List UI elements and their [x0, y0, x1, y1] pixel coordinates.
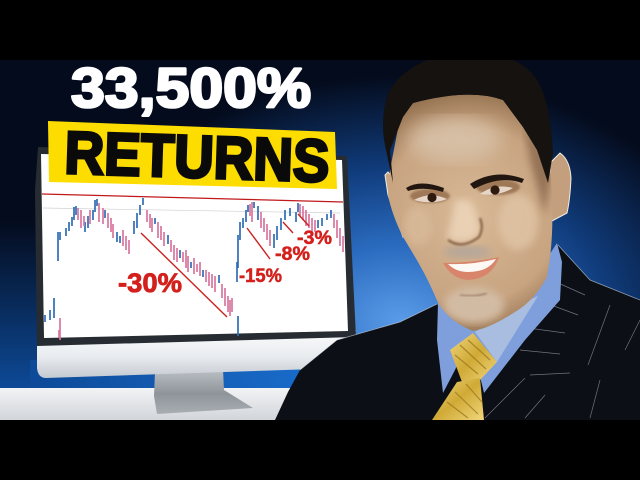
white of left eye	[414, 195, 447, 202]
headline: 33,500%: 33,500%	[71, 56, 311, 119]
label -30%: -30%	[118, 268, 182, 298]
lips	[443, 257, 499, 280]
right iris	[490, 185, 500, 195]
background: blue spotlight	[0, 60, 640, 420]
computer monitor	[35, 147, 356, 414]
lower left glow	[0, 220, 60, 390]
yellow banner	[48, 121, 337, 189]
suit jacket	[275, 245, 640, 420]
face	[388, 95, 552, 331]
tie knot	[450, 333, 497, 382]
chin crease	[460, 293, 487, 296]
teeth	[448, 259, 496, 272]
man in suit	[275, 60, 640, 420]
banner text: RETURNS	[64, 119, 331, 195]
collar shading	[475, 296, 538, 362]
nose highlight	[447, 200, 480, 242]
left ear	[385, 172, 407, 237]
right eye	[480, 185, 513, 195]
blue band behind monitor	[30, 360, 340, 388]
tie stripes	[447, 340, 490, 418]
pink candles	[59, 202, 343, 340]
headline banner: RETURNS	[48, 119, 337, 195]
trend line -3%	[298, 214, 309, 226]
forehead highlight	[409, 118, 501, 162]
left eyebrow	[406, 184, 444, 192]
horizontal grid line	[43, 208, 340, 213]
pinstripes	[485, 282, 640, 418]
left iris	[427, 193, 437, 202]
left eye socket shadow	[410, 189, 450, 203]
trend line -15%	[247, 228, 270, 259]
mouth	[443, 257, 499, 280]
label -8%: -8%	[275, 244, 310, 265]
top letterbox bar	[0, 0, 640, 60]
face shading, clipped to the face	[404, 118, 552, 323]
left eye	[414, 193, 447, 202]
right eye socket shadow	[476, 179, 520, 195]
nose shadow	[448, 218, 482, 244]
hair	[383, 60, 553, 183]
gold tie	[432, 333, 497, 420]
blue candles	[45, 198, 331, 336]
monitor bezel	[35, 147, 356, 346]
shirt collar	[437, 243, 562, 393]
temple shadow	[525, 125, 552, 215]
right cheek highlight	[498, 194, 538, 250]
trend line -30%	[141, 233, 227, 317]
label -15%: -15%	[239, 266, 282, 287]
monitor chin	[37, 330, 356, 378]
label -3%: -3%	[297, 228, 332, 249]
white of right eye	[480, 186, 513, 195]
right eyebrow	[470, 175, 524, 189]
tie blade	[432, 378, 484, 420]
bottom letterbox bar	[0, 420, 640, 480]
monitor stand	[154, 369, 253, 414]
trend line -8%	[283, 222, 293, 233]
monitor screen	[41, 154, 348, 338]
chin highlight	[444, 287, 504, 323]
left cheek highlight	[404, 208, 430, 244]
top resistance line	[42, 194, 343, 202]
rim light on shoulders	[300, 245, 640, 370]
candlestick chart	[43, 198, 343, 340]
upper lip grey	[443, 246, 491, 258]
floor	[0, 388, 330, 420]
right ear	[550, 153, 571, 222]
